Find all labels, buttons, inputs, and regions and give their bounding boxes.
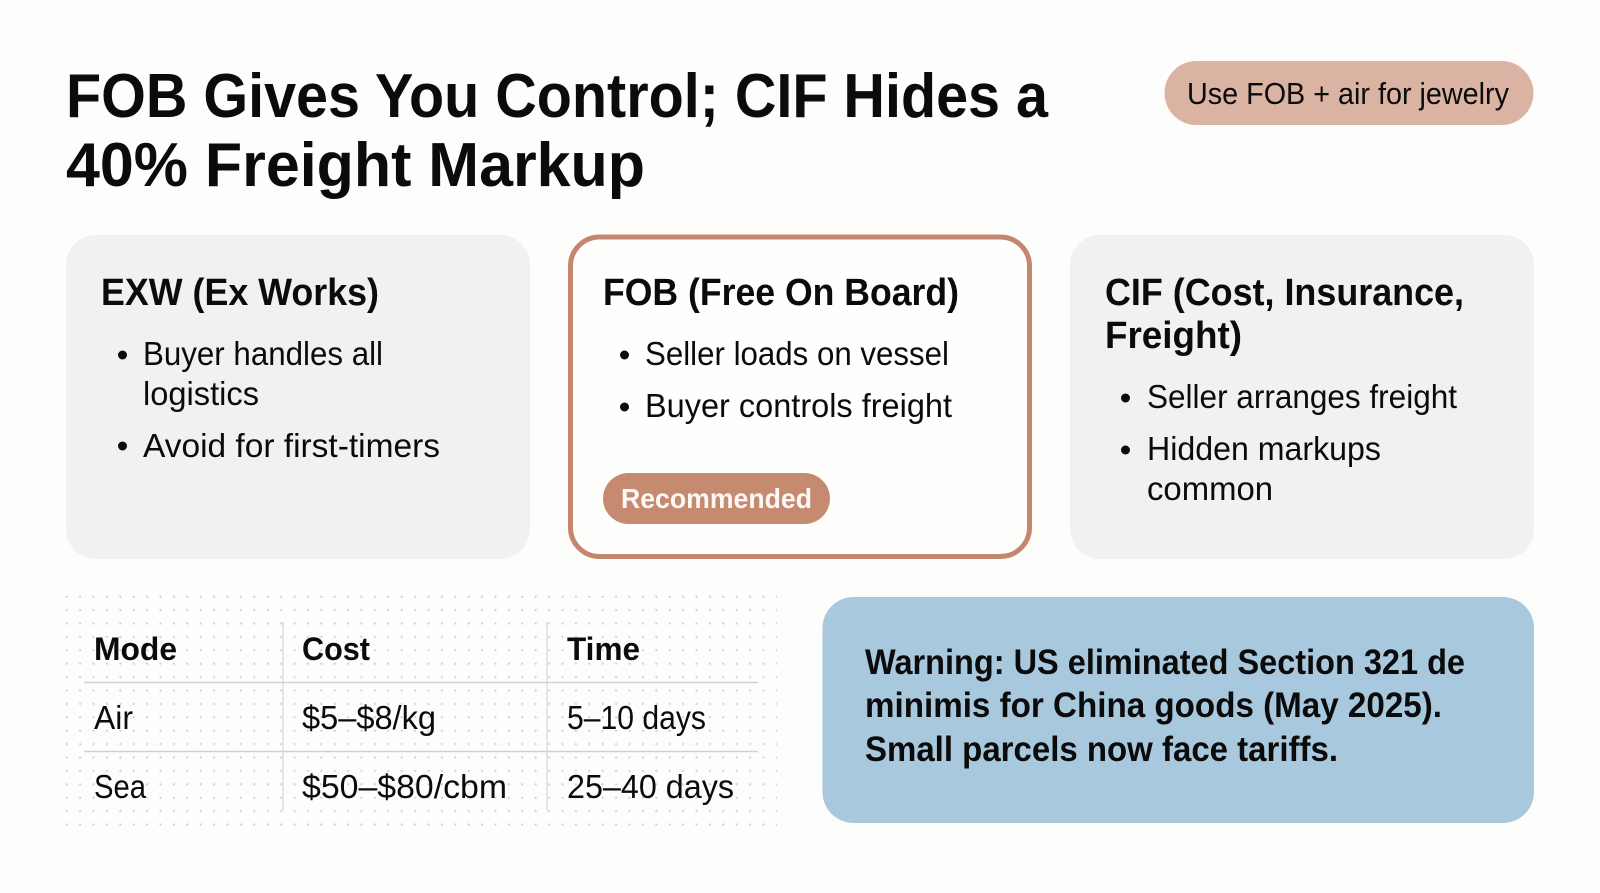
bullet list: FOB: Buyer controls freight: [645, 387, 952, 424]
title: [66, 62, 1048, 200]
callout pill: use FOB + air: Use FOB + air for jewelry: [1187, 76, 1509, 111]
bullet list: EXW: Buyer handles all: [143, 335, 383, 372]
warning text: Warning: US eliminated Section 321 de: [865, 643, 1465, 682]
table row: sea: $50–$80/cbm: [302, 768, 507, 805]
bullet list: EXW: logistics: [143, 375, 259, 412]
warning text: minimis for China goods (May 2025).: [865, 686, 1442, 725]
table header row: Time: [567, 631, 640, 667]
badge: recommended: [603, 473, 830, 524]
callout pill: use FOB + air: [1164, 61, 1534, 125]
bullet list: FOB: [620, 335, 952, 424]
heading: CIF: CIF (Cost, Insurance,: [1105, 272, 1464, 314]
table header row: [94, 631, 640, 667]
table: freight mode comparison: [60, 590, 777, 828]
panel: CIF: [1070, 235, 1534, 559]
table header row: Mode: [94, 631, 177, 667]
bullet list: EXW: Avoid for first-timers: [143, 427, 440, 464]
heading: EXW: EXW (Ex Works): [101, 272, 379, 314]
heading: CIF: Freight): [1105, 315, 1242, 357]
panel: FOB recommended: [570, 237, 1030, 556]
warning text: [865, 643, 1465, 769]
bullet list: CIF: [1121, 378, 1457, 507]
bullet list: EXW: [118, 335, 440, 464]
table row: sea: 25–40 days: [567, 768, 734, 805]
bullet list: FOB: Seller loads on vessel: [645, 335, 949, 372]
badge: recommended: Recommended: [621, 483, 812, 514]
heading: FOB: FOB (Free On Board): [603, 272, 959, 314]
table row: air: [94, 699, 706, 736]
warning text: Small parcels now face tariffs.: [865, 730, 1338, 769]
panel: EXW: [66, 235, 530, 559]
bullet list: CIF: Seller arranges freight: [1147, 378, 1457, 415]
table row: sea: [94, 768, 734, 805]
title: FOB Gives You Control; CIF Hides a: [66, 62, 1048, 131]
bullet list: CIF: Hidden markups: [1147, 430, 1381, 467]
table row: air: $5–$8/kg: [302, 699, 436, 736]
warning panel: [822, 597, 1534, 823]
table header row: Cost: [302, 631, 370, 667]
title: 40% Freight Markup: [66, 131, 645, 200]
table row: sea: Sea: [94, 768, 147, 805]
bullet list: CIF: common: [1147, 470, 1273, 507]
heading: CIF: [1105, 272, 1464, 357]
table row: air: 5–10 days: [567, 699, 706, 736]
table row: air: Air: [94, 699, 133, 736]
